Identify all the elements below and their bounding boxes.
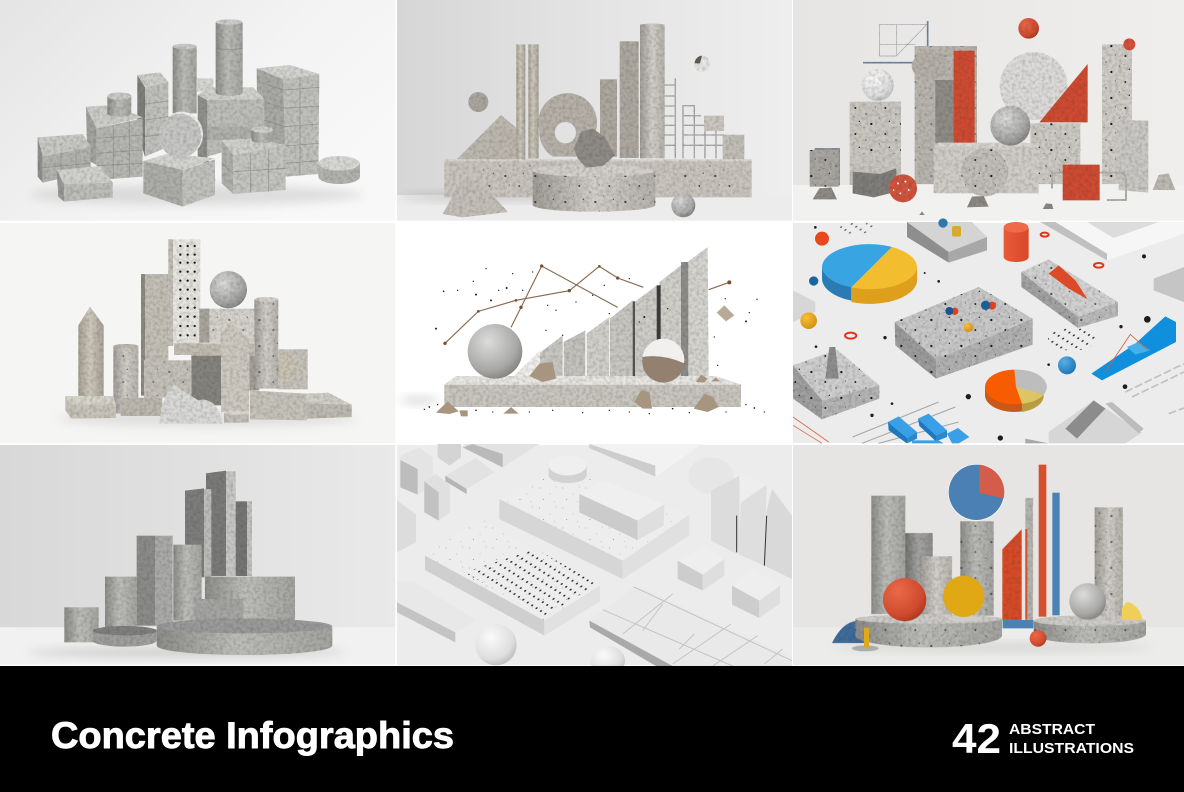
left grid block [86,105,143,180]
front block on disc [195,599,243,622]
speckled tower [1102,44,1132,184]
orange wedge [1002,529,1022,620]
centre speckled column [960,521,994,616]
small coloured balls [800,232,1076,374]
slabs [600,41,639,158]
short cylinder [105,577,137,627]
small rocks [813,173,1175,215]
panel: rising concrete bar chart with line graph [396,223,792,443]
yellow peg [852,628,879,651]
rocks [436,305,734,416]
small cubes [678,547,780,618]
block with small cylinders [907,218,987,263]
panel: colourful composition with pie disc and columns [793,445,1184,665]
lower left block with spike [793,347,879,419]
red wedge [1049,265,1088,299]
big pale circle [1000,52,1068,120]
ladder and grid frames [664,78,724,158]
red dot [1123,38,1135,50]
grey ball [1069,583,1106,620]
speckled red ball [889,174,917,202]
large centre block [197,78,264,182]
title: Concrete Infographics [51,715,454,756]
short cylinder [107,92,131,117]
tall cylinder [173,44,197,113]
large stepped slab [499,467,689,579]
perforated tower [168,239,200,346]
small orange ball [1030,630,1046,647]
grey folded shapes [1025,400,1144,443]
speckled pillar [850,102,901,185]
right grid block [222,138,286,194]
wire diagram [863,21,928,95]
blue ramp [1091,316,1176,380]
spheres [475,624,625,676]
tall column [640,23,665,158]
panel: warm concrete composition with ring and ladder [397,0,792,221]
stacked block [137,72,168,157]
white ball [862,69,894,101]
square column [137,536,173,626]
trapezoid block [443,180,508,217]
panel: beige concrete skyline [0,223,395,443]
right rear block [199,309,254,343]
small disc base [93,626,157,647]
base box [934,143,1039,193]
round disc [549,455,587,483]
pie chart: orange [985,370,1047,412]
house block [221,322,249,412]
right cylinder [254,297,278,389]
speckled central block [895,287,1033,379]
low slab [121,398,162,416]
chart lines [793,364,1184,443]
low disc [318,156,360,184]
red ball [1018,18,1039,39]
sliced circle [694,56,710,72]
small block [64,607,99,642]
front centre block [143,153,215,207]
grey ball [990,106,1030,146]
tall grid tower [257,65,319,177]
panel: dark grey concrete columns on round plinth [0,445,395,665]
pie chart: blue and yellow [822,244,917,304]
low left bar [397,581,476,642]
speckled cylinder [113,344,138,414]
panel: concrete shapes with red accents [793,0,1184,221]
rear slabs [438,444,703,477]
tall slab [141,274,168,396]
top block [579,481,664,540]
large round plinth [157,619,332,655]
red square and tube [1052,165,1126,200]
small squares [704,116,744,159]
red and blue bars [1003,465,1060,628]
low left block [38,134,91,183]
footer bar [0,666,1184,792]
left cubes [810,148,896,197]
scattered particles [424,268,765,414]
small ball [671,193,695,217]
blob stone [912,52,949,80]
rising bars [513,247,709,379]
faceted stone [574,128,615,168]
large grey columns [871,496,952,616]
tall white blocks left [397,447,450,552]
middle plates [144,343,259,405]
small cylinder on block [252,126,273,143]
count: 42 [952,715,1001,762]
pie disc [948,464,1005,521]
right plinth [1034,615,1146,643]
left plinth [832,614,1002,647]
round cylinder rear [277,349,308,389]
twin columns [516,44,539,159]
red triangle [1039,64,1088,122]
block with red wedge [1021,259,1118,328]
count label [1009,721,1134,757]
panel: grey concrete blocks and cylinders with grid lines [0,0,395,221]
count label: ABSTRACT [1009,721,1096,738]
floating circle [468,92,488,112]
plan slab [589,586,792,666]
long platform [444,159,752,197]
line graph [445,266,729,343]
pale sheet [1119,120,1148,193]
tall slab with red panel [915,46,977,184]
panel: white isometric concrete tiles [397,444,792,676]
panel: isometric concrete blocks with coloured pie charts [793,218,1184,443]
obelisk [78,307,104,401]
balls on central block [945,301,996,332]
left base [65,396,116,419]
speckled sphere [210,271,247,308]
concrete spheres [468,324,684,383]
ring [538,93,597,157]
base slab [444,376,741,407]
triangle [457,115,522,159]
halftone top left [835,222,875,234]
pale slabs top right [1040,222,1184,260]
red cylinder [1004,222,1029,262]
small disc [224,411,249,423]
blue bar chart [888,414,969,443]
wedge blocks right [688,457,792,579]
round disc [159,112,203,158]
wide cylinder [205,577,295,621]
tall rear bars [185,471,252,577]
cylinder column [173,545,202,621]
speckled block [1030,123,1080,184]
yellow disc [943,576,984,622]
perforated slab [425,519,600,636]
red rings [845,233,1103,339]
orange ball [883,578,926,621]
thin grey pillar [1025,498,1033,620]
right column [1095,507,1123,617]
small front block [57,166,113,202]
thin plate [445,458,494,494]
count label: ILLUSTRATIONS [1009,740,1134,757]
graph points [443,264,731,345]
scattered dots [814,226,1151,441]
tallest cylinder [216,19,243,96]
round pedestal [533,165,655,212]
corner blocks [793,267,1184,322]
yellow half shape [1122,602,1143,620]
halftone cluster [1048,328,1096,351]
front base blocks [250,390,352,420]
white arches [159,385,222,424]
speckled disc [961,148,1008,196]
